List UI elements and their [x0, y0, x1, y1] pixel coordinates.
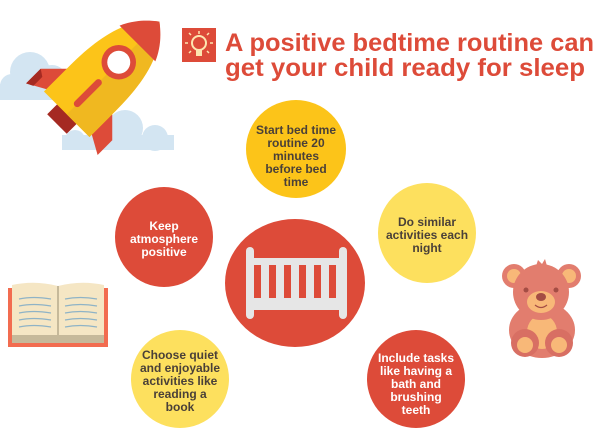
- circle: include tasks: brushing: [390, 390, 442, 404]
- clouds: [0, 52, 174, 151]
- circle: keep atmosphere positive: [115, 187, 213, 287]
- icon: lightbulb: [182, 28, 216, 62]
- circle: choose quiet activities: and enjoyable: [140, 361, 220, 375]
- circle: include tasks: Include tasks: [378, 351, 454, 365]
- circle: choose quiet activities: book: [166, 400, 195, 414]
- circle: choose quiet activities: Choose quiet: [142, 348, 218, 362]
- circle: include tasks: like having a: [380, 364, 452, 378]
- center circle: crib: [225, 219, 365, 347]
- icon: teddy bear: [502, 259, 581, 358]
- circle: include tasks: bath and: [391, 377, 441, 391]
- circle: keep atmosphere positive: Keep: [149, 219, 179, 233]
- icon: book: [8, 283, 108, 347]
- circle: choose quiet activities: reading a: [153, 387, 207, 401]
- circle: include tasks: [367, 330, 465, 428]
- circle: start bed time: time: [284, 175, 309, 189]
- circle: keep atmosphere positive: positive: [141, 245, 187, 259]
- title: get your child ready for sleep: [225, 54, 585, 82]
- icon: rocket: [21, 0, 195, 160]
- circle: choose quiet activities: activities like: [143, 374, 218, 388]
- circle: choose quiet activities: [131, 330, 229, 428]
- circle: start bed time: routine 20: [267, 136, 325, 150]
- circle: start bed time: [246, 100, 346, 198]
- title: [225, 29, 594, 82]
- title: A positive bedtime routine can: [225, 29, 594, 57]
- circle: do similar activities: [378, 183, 476, 283]
- circle: do similar activities: night: [412, 241, 442, 255]
- circle: do similar activities: Do similar: [398, 215, 456, 229]
- circle: start bed time: Start bed time: [256, 123, 336, 137]
- circle: start bed time: before bed: [265, 162, 327, 176]
- circle: keep atmosphere positive: atmosphere: [130, 232, 198, 246]
- circle: include tasks: teeth: [402, 403, 430, 417]
- circle: start bed time: minutes: [273, 149, 319, 163]
- circle: do similar activities: activities each: [386, 228, 468, 242]
